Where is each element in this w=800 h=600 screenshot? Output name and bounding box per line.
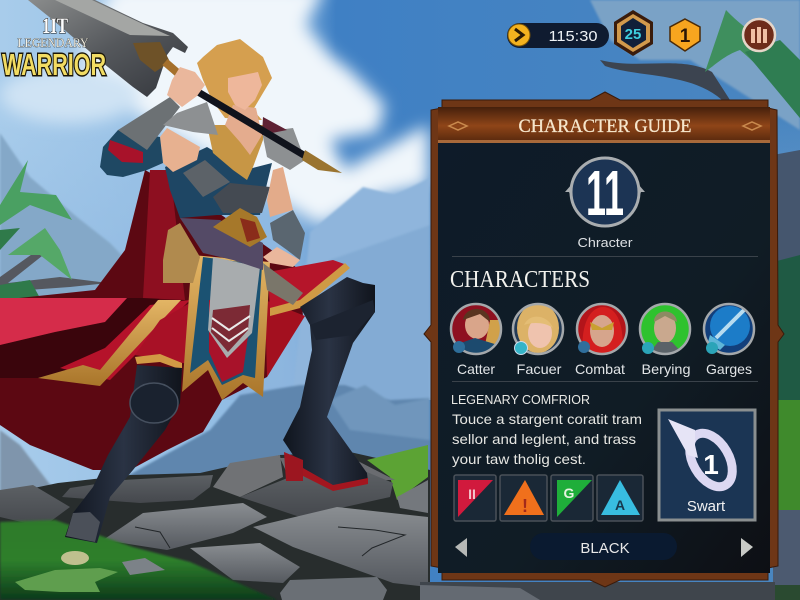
belt pouch [163, 223, 200, 283]
character names: Garges [706, 361, 752, 377]
description text [452, 411, 642, 467]
description text: Touce a stargent coratit tram [452, 411, 642, 427]
HUD menu icon [743, 19, 775, 51]
portrait: Facuer [512, 303, 564, 355]
rocky ground and grass [0, 445, 775, 600]
face [228, 72, 262, 110]
game logo: WARRIOR [2, 47, 106, 82]
neck and pendant [225, 105, 262, 155]
panel frame [424, 92, 784, 587]
skill tile: cyan: A [615, 497, 625, 513]
right arm with bracer [263, 167, 305, 267]
panel header [438, 107, 770, 143]
bottom selector [530, 533, 677, 560]
portrait: Catter [450, 303, 505, 356]
badge caption: Chracter [578, 235, 633, 250]
Swart rank card [659, 410, 755, 520]
arrow left [455, 538, 467, 557]
description text: sellor and leglent, and trass [452, 431, 636, 447]
knee guard [130, 383, 178, 423]
number badge [565, 157, 645, 229]
game logo [2, 13, 106, 82]
skill tile: orange: ! [522, 496, 528, 516]
hanging metal flap [263, 263, 303, 305]
game logo: LEGENDARY [18, 35, 89, 50]
front leg boot [283, 277, 375, 491]
Swart rank card: Swart [687, 498, 726, 515]
game logo: 1IT [42, 13, 68, 38]
characters heading: CHARACTERS [450, 267, 590, 293]
gripping hand [167, 67, 205, 107]
top-right foliage and branch [600, 10, 800, 600]
character names [457, 361, 752, 377]
panel: character guide [424, 92, 784, 587]
HUD gold badge [670, 19, 700, 51]
HUD timer pill: 115:30 [548, 28, 598, 45]
HUD timer pill [507, 23, 609, 48]
Swart rank card: 1 [703, 449, 719, 480]
shoulder pads [163, 102, 305, 170]
HUD level hexagon [614, 10, 653, 56]
cape [0, 170, 350, 470]
skill tile: red: II [468, 486, 476, 502]
number badge: 11 [586, 157, 624, 229]
bottom selector: BLACK [580, 540, 630, 557]
hair [197, 39, 272, 180]
description heading: LEGENARY COMFRIOR [451, 392, 590, 407]
warrior character [0, 0, 375, 543]
skill tile: green [551, 475, 593, 521]
raised arm and bracer [100, 97, 200, 177]
character names: Combat [575, 361, 625, 377]
tabard [182, 255, 270, 400]
panel header: CHARACTER GUIDE [518, 116, 692, 137]
clouds [0, 0, 428, 225]
HUD level hexagon: 25 [625, 26, 641, 43]
character names: Berying [642, 361, 690, 377]
character names: Catter [457, 361, 495, 377]
skill tile: orange [500, 475, 547, 521]
character names: Facuer [516, 361, 562, 377]
portrait: Berying [639, 303, 691, 355]
arrow right [741, 538, 753, 557]
skill tile: red [454, 475, 496, 521]
portrait: Garges [703, 303, 755, 355]
left palm foliage [0, 160, 108, 300]
sword [28, 0, 342, 173]
description text: your taw tholig cest. [452, 451, 586, 467]
torso [165, 147, 272, 270]
back boot toe [66, 512, 100, 542]
back leg boot [65, 365, 182, 543]
skill tile: cyan [597, 475, 643, 521]
portrait: Combat [576, 303, 628, 355]
HUD gold badge: 1 [680, 26, 691, 47]
skill tile: green: G [564, 485, 575, 501]
